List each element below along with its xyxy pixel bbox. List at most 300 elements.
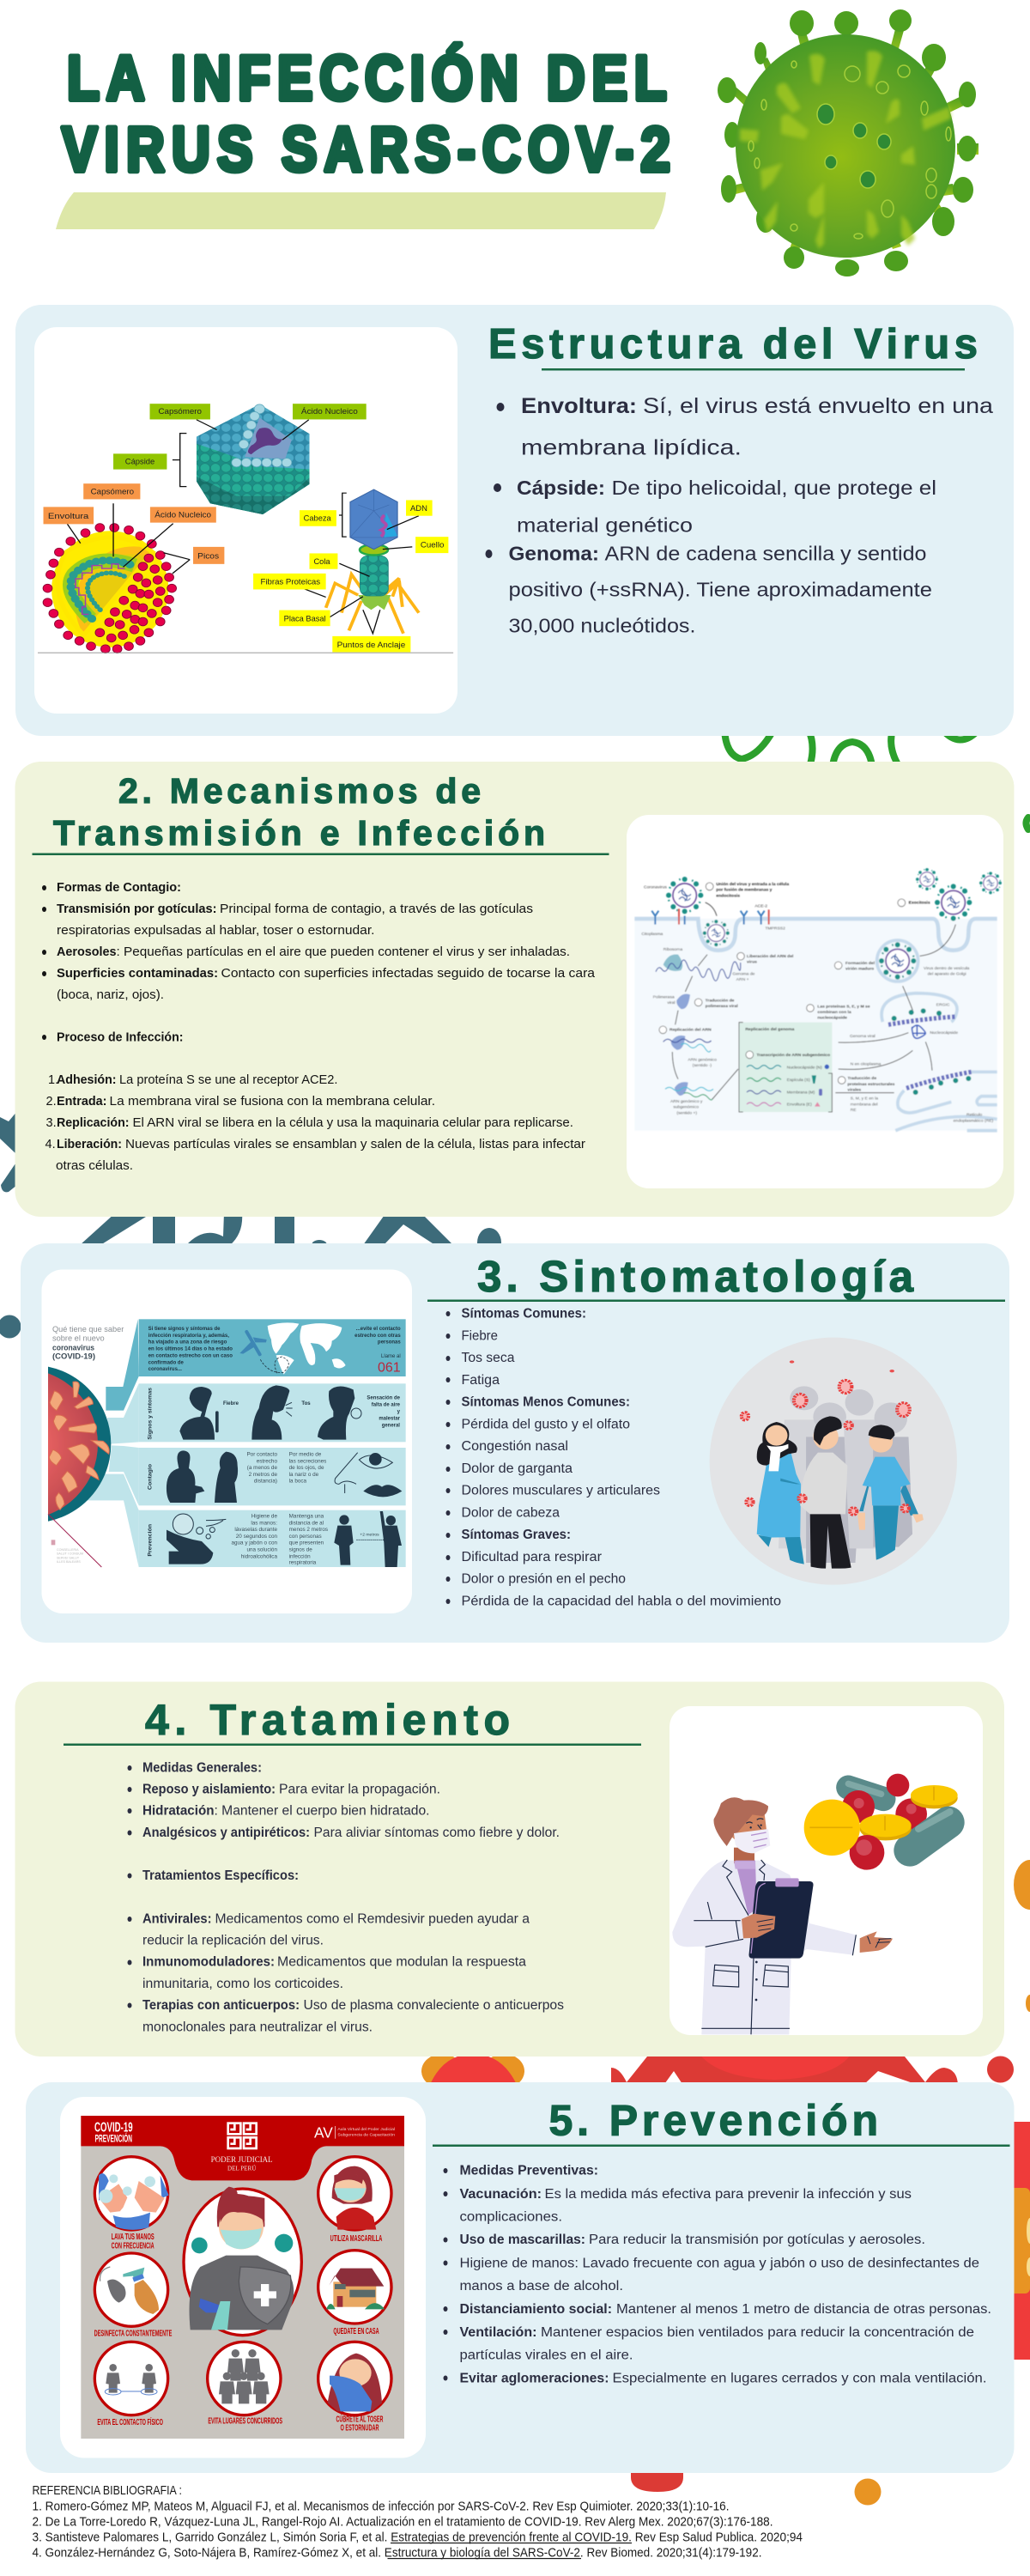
row 2 signs and symptoms: general [382, 1423, 400, 1428]
diagram captions: S, M, y E en la [851, 1097, 878, 1102]
row 4 prevention: distancia de al [289, 1520, 324, 1526]
references block: 2. De La Torre-Loredo R, Vázquez-Luna JL, Rangel-Rojo AI. Actualización en el tratamiento de COVID-19. Rev Alerg Mex. 2020;67(3):176-188. [33, 2514, 772, 2530]
arrows [672, 902, 955, 1099]
prevention list: complicaciones. [460, 2210, 562, 2224]
diagram captions: virales [847, 1088, 861, 1093]
treatment list: Medicamentos como el Remdesivir pueden ayudar a [215, 1911, 530, 1927]
diagram captions: membrana del [851, 1102, 878, 1107]
row 1 travel and contact: 061 [378, 1360, 401, 1375]
row 2 signs and symptoms: Sensación de [367, 1396, 401, 1401]
panel: prevencion [26, 2082, 1015, 2473]
caption: wash hands: LAVA TUS MANOS [112, 2233, 154, 2242]
diagram labels: Placa Basal [284, 615, 326, 623]
infographic title [52, 1325, 124, 1361]
row 3 contagion: Por contacto [246, 1451, 277, 1457]
panel background [15, 762, 1015, 1217]
diagram labels: Fibras Proteicas [260, 578, 320, 586]
diagram labels: Cabeza [304, 514, 331, 523]
bullet: envoltura: Envoltura: [521, 394, 637, 418]
row 4 prevention: lávaselas durante [234, 1527, 277, 1533]
diagram captions: Coronavirus [644, 885, 667, 890]
heading underline [64, 1743, 641, 1746]
heading underline [433, 2145, 1009, 2147]
diagram labels [44, 404, 448, 652]
pills [804, 1774, 958, 1870]
references block [33, 2483, 803, 2561]
RNA strands [656, 960, 817, 1100]
woman [757, 1422, 804, 1564]
row 2 signs and symptoms: Signos y síntomas [148, 1387, 154, 1440]
title line 1: LA INFECCIÓN DEL [67, 43, 667, 113]
panel background [21, 1243, 1009, 1643]
diagram captions: ARN genómico y [670, 1099, 703, 1104]
pointer lines [67, 420, 419, 634]
diagram labels: Capsómero [91, 488, 135, 496]
treatment list: Reposo y aislamiento: [142, 1783, 276, 1796]
diagram captions: Membrana (M) [787, 1091, 815, 1096]
symptoms list: Síntomas Graves: [462, 1528, 571, 1542]
caption: disinfect: DESINFECTA CONSTANTEMENTE [94, 2330, 173, 2339]
image card: covid-19 infographic: CONSELLERIA [57, 1548, 79, 1552]
row 3 contagion: Por medio de [289, 1451, 322, 1457]
symptoms list [446, 1307, 781, 1609]
diagram captions: subgenómico [673, 1105, 699, 1110]
bullet: capside: material genético [517, 513, 693, 536]
diagram captions: virus [747, 960, 757, 965]
caption: wash hands: CON FRECUENCIA [112, 2241, 154, 2251]
poster header: PODER JUDICIAL [211, 2155, 273, 2164]
bullet: capside [494, 477, 936, 536]
bullet: genoma: ARN de cadena sencilla y sentido [604, 543, 927, 565]
row 3 contagion: la nariz o de [289, 1472, 319, 1478]
title [62, 43, 670, 185]
image card: doctor and pills [670, 1706, 983, 2035]
row 4 prevention: Prevención [148, 1524, 154, 1557]
proceso de infeccion steps: Nuevas partículas virales se ensamblan y salen de la célula, listas para infectar [125, 1138, 585, 1151]
treatment list: Para evitar la propagación. [279, 1783, 440, 1796]
treatment list: Tratamientos Específicos: [142, 1868, 299, 1883]
prevention list [443, 2164, 991, 2385]
prevention list: Para reducir la transmisión por gotículas y aerosoles. [589, 2233, 925, 2247]
diagram captions: Espícula (S) [787, 1078, 810, 1083]
bullet: genoma: 30,000 nucleótidos. [508, 615, 695, 637]
row 2 signs and symptoms: Tos [301, 1401, 311, 1406]
prevention list: Uso de mascarillas: [460, 2233, 585, 2247]
panel: tratamiento [15, 1681, 1004, 2057]
treatment list [127, 1760, 564, 2035]
poster header [81, 2116, 404, 2180]
diagram labels: Cuello [421, 541, 445, 550]
row 4 prevention: hidroalcohólica [241, 1553, 277, 1559]
row 4 prevention [139, 1510, 406, 1567]
references block: REFERENCIA BIBLIOGRAFIA : [33, 2483, 182, 2498]
row 3 contagion [139, 1448, 406, 1505]
proceso de infeccion steps: 4. [45, 1138, 56, 1151]
prevention list: Mantener al menos 1 metro de distancia de otras personas. [616, 2302, 991, 2317]
infographic title: (COVID-19) [52, 1352, 95, 1361]
white receptors and ER [877, 940, 997, 1131]
row 4 prevention: +2 metros [360, 1533, 379, 1538]
diagram captions: Ribosoma [663, 947, 682, 952]
diagram captions: polimerasa viral [706, 1004, 738, 1009]
treatment list: Uso de plasma convaleciente o anticuerpos [304, 1998, 564, 2013]
bullet: genoma [486, 543, 932, 637]
treatment list: reducir la replicación del virus. [142, 1934, 324, 1947]
diagram labels: ADN [410, 505, 427, 513]
symptoms list: Dificultad para respirar [462, 1550, 602, 1564]
row 1 travel and contact: en contacto estrecho con un caso [148, 1354, 233, 1359]
row 1 travel and contact: en los últimos 14 días o ha estado [148, 1347, 233, 1352]
references block: 3. Santisteve Palomares L, Garrido González L, Simón Soria F, et al. Estrategias de prevención frente al COVID-19. Rev Esp Salud Publica. 2020;94 [33, 2530, 803, 2545]
diagram captions: Genoma de [732, 971, 755, 976]
caption: crowds: EVITA LUGARES CONCURRIDOS [208, 2417, 282, 2427]
row 2 signs and symptoms: malestar [379, 1416, 401, 1421]
row 1 travel and contact: infección respiratoria y, además, [148, 1334, 229, 1339]
diagram captions: Virus dentro de vesícula [924, 966, 970, 971]
background decorative shapes [0, 730, 1030, 2506]
row 3 contagion: de los ojos, de [289, 1465, 324, 1471]
diagram labels: Picos [197, 552, 219, 561]
diagram captions: Retículo [966, 1113, 983, 1118]
row 1 travel and contact: estrecho con otras [354, 1334, 401, 1339]
icon: mask [318, 2157, 391, 2230]
diagram captions: Genoma viral [850, 1034, 876, 1039]
prevention list: Evitar aglomeraciones: [460, 2372, 609, 2385]
row 4 prevention: las manos: [251, 1520, 277, 1526]
formas de contagio list: Formas de Contagio: [57, 881, 181, 895]
treatment list: monoclonales para neutralizar el virus. [142, 2020, 373, 2035]
diagram captions: Traducción de [706, 998, 735, 1003]
bullet: capside: De tipo helicoidal, que protege el [611, 477, 936, 499]
icon: green coronavirus [718, 9, 978, 276]
orange and red shapes on the right edge and gaps [421, 1860, 1030, 2506]
heading: mecanismos: 2. Mecanismos de [118, 771, 484, 811]
row 4 prevention: una solución [246, 1546, 277, 1552]
diagram labels: Ácido Nucleico [301, 408, 358, 416]
diagram captions: Replicación del genoma [745, 1027, 795, 1032]
ribosome and polymerase [663, 954, 682, 971]
ground line [38, 652, 453, 653]
poster header: DEL PERÚ [227, 2165, 256, 2172]
proceso de infeccion steps [45, 1073, 585, 1173]
diagram captions [641, 882, 994, 1123]
poster header: Subgerencia de Capacitación [337, 2132, 395, 2137]
row 4 prevention: que presenten [289, 1540, 324, 1546]
treatment list: Medidas Generales: [142, 1760, 262, 1776]
formas de contagio list: : Pequeñas partículas en el aire que pueden contener el virus y ser inhaladas. [117, 945, 570, 959]
formas de contagio list [42, 881, 596, 1044]
heading: mecanismos [53, 771, 548, 853]
diagram captions: Liberación del ARN del [747, 954, 794, 959]
symptoms list: Síntomas Menos Comunes: [462, 1394, 630, 1410]
world map [268, 1322, 346, 1375]
red virus circle [48, 1367, 112, 1522]
diagram captions: (sentido +) [676, 1110, 697, 1115]
treatment list: Hidratación [142, 1803, 215, 1819]
poster header: Aula Virtual del Poder Judicial [337, 2127, 395, 2132]
caption: cover cough: O ESTORNUDAR [340, 2424, 379, 2433]
diagram captions: Unión del virus y entrada a la célula [716, 882, 789, 887]
symptoms list: Tos seca [462, 1351, 515, 1365]
panel: estructura del virus [15, 305, 1014, 736]
diagram captions: nucleocápside [817, 1016, 847, 1021]
red virus particles [742, 1380, 910, 1515]
enveloped virus [43, 524, 177, 653]
diagram captions: ARN genómico [688, 1057, 717, 1062]
prevention list: manos a base de alcohol. [460, 2279, 623, 2293]
row 4 prevention: con personas [289, 1534, 322, 1540]
diagram captions: endocitosis [716, 893, 740, 898]
heading underline [542, 368, 965, 371]
row 3 contagion: las secreciones [289, 1458, 326, 1464]
diagram labels: Cola [313, 558, 330, 567]
diagram captions: Exocitosis [909, 900, 930, 905]
proceso de infeccion steps: Replicación: [57, 1116, 129, 1130]
panel background [15, 305, 1014, 736]
diagram captions: Las proteínas S, E, y M se [817, 1004, 870, 1009]
capsid diagram [194, 401, 312, 517]
image card: virus structure diagram [34, 327, 457, 714]
row 3 contagion: 2 metros de [249, 1472, 277, 1478]
diagram labels: Envoltura [48, 513, 89, 521]
treatment list: : Mantener el cuerpo bien hidratado. [215, 1803, 429, 1819]
symptoms list: Dolor o presión en el pecho [462, 1571, 626, 1587]
diagram captions: Citoplasma [641, 932, 663, 937]
row 1 travel and contact: confirmado de [148, 1360, 185, 1365]
boy in blue [857, 1425, 924, 1560]
symptoms list: Pérdida de la capacidad del habla o del movimiento [462, 1594, 781, 1609]
caption: cover cough [336, 2414, 384, 2433]
diagram captions: proteínas estructurales [847, 1082, 895, 1087]
symptoms list: Congestión nasal [462, 1439, 568, 1454]
proceso de infeccion steps: Entrada: [57, 1095, 106, 1109]
row 1 travel and contact: Llame al [381, 1354, 401, 1359]
background shadow people [779, 1386, 912, 1563]
diagram captions: combinan con la [817, 1010, 851, 1015]
diagram labels: Puntos de Anclaje [337, 641, 406, 650]
diagram captions: Transcripción de ARN subgenómico [756, 1053, 830, 1058]
symptoms list: Dolor de cabeza [462, 1506, 560, 1520]
panel background [15, 1681, 1004, 2057]
treatment list: Para aliviar síntomas como fiebre y dolor. [314, 1826, 560, 1840]
poster header: COVID-19 [94, 2121, 133, 2136]
diagram labels: Cápside [125, 458, 155, 466]
poster background [81, 2116, 404, 2439]
title highlight bar [56, 192, 666, 229]
diagram captions: ERGIC [936, 1003, 950, 1008]
proceso de infeccion steps: Liberación: [57, 1138, 122, 1151]
icon: wash hands [94, 2157, 169, 2230]
infographic title: coronavirus [52, 1343, 94, 1352]
diagram captions: viral [667, 1000, 675, 1005]
diagram captions: Formación del [845, 961, 876, 966]
title line 2: VIRUS SARS-COV-2 [62, 115, 670, 185]
proceso de infeccion steps: 2. [46, 1095, 57, 1109]
row 3 contagion: distancia) [254, 1479, 277, 1485]
row 1 travel and contact: Si tiene signos y síntomas de [148, 1327, 221, 1332]
treatment list: Terapias con anticuerpos: [142, 1998, 300, 2013]
references block: 4. González-Hernández G, Soto-Nájera B, Ramírez-Gómez X, et al. Estructura y biología del SARS-CoV-2. Rev Biomed. 2020;31(4):179-192. [33, 2545, 762, 2561]
heading: tratamiento: 4. Tratamiento [145, 1696, 513, 1744]
doctor [672, 1797, 893, 2034]
panel: sintomatologia [0, 1243, 1009, 1643]
icon: central masked figure [184, 2187, 301, 2336]
prevention list: Es la medida más efectiva para prevenir la infección y sus [544, 2187, 912, 2202]
row 4 prevention: menos 2 metros [289, 1527, 328, 1533]
bullet: envoltura [496, 394, 993, 460]
icon: physical distance [94, 2342, 168, 2415]
row 1 travel and contact: coronavirus... [148, 1367, 182, 1372]
transcripts box [739, 1023, 832, 1112]
diagram captions: Nucleocápside (N) [787, 1065, 822, 1070]
diagram captions: Envoltura (E) [787, 1103, 812, 1108]
infographic title: sobre el nuevo [52, 1334, 105, 1343]
prevention list: partículas virales en el aire. [460, 2348, 633, 2363]
row 3 contagion: Contagio [148, 1464, 154, 1490]
symptoms list: Pérdida del gusto y el olfato [462, 1417, 630, 1432]
bullet: capside: Cápside: [517, 477, 605, 499]
row 2 signs and symptoms: y [397, 1410, 401, 1415]
panel background [26, 2082, 1015, 2473]
heading underline [427, 1300, 1005, 1302]
image card: covid-19 infographic [41, 1269, 412, 1613]
diagram captions: ARN + [736, 977, 749, 982]
symptoms list: Dolores musculares y articulares [462, 1484, 660, 1498]
bullet: genoma: positivo (+ssRNA). Tiene aproximadamente [508, 579, 932, 601]
diagram labels: Ácido Nucleico [154, 511, 212, 519]
poster header: AV [314, 2123, 333, 2141]
prevention list: Vacunación: [460, 2187, 542, 2202]
symptoms list: Síntomas Comunes: [462, 1307, 586, 1321]
proceso de infeccion steps: La proteína S se une al receptor ACE2. [119, 1073, 338, 1087]
formas de contagio list: Proceso de Infección: [57, 1030, 184, 1044]
image card: covid-19 infographic: ILLES BALEARS [57, 1560, 81, 1564]
diagram captions: virión maduro [845, 967, 874, 972]
references block: 1. Romero-Gómez MP, Mateos M, Alguacil FJ, et al. Mecanismos de infección por SARS-CoV-2. Rev Esp Quimioter. 2020;33(1):10-16. [33, 2499, 730, 2514]
heading: mecanismos: Transmisión e Infección [53, 813, 548, 853]
heading: prevencion: 5. Prevención [549, 2097, 882, 2145]
diagram captions: Traducción de [847, 1076, 876, 1081]
heading: estructura del virus: Estructura del Virus [488, 321, 981, 368]
treatment list: Analgésicos y antipiréticos: [142, 1826, 310, 1840]
receptors [651, 908, 769, 925]
diagram captions: Polimerasa [653, 994, 675, 999]
proceso de infeccion steps: Adhesión: [57, 1073, 117, 1087]
row 1 travel and contact: ...evite el contacto [356, 1327, 401, 1332]
endoplasmic reticulum spikes [888, 1008, 972, 1095]
image card: prevention poster [60, 2097, 426, 2458]
illustration: sick people in a circle [710, 1338, 957, 1585]
formas de contagio list: Transmisión por gotículas: [57, 902, 216, 916]
green doodles between panels 1 and 2 [724, 730, 1028, 829]
diagram captions: RE [851, 1108, 857, 1113]
bullet: envoltura: Sí, el virus está envuelto en una [643, 394, 993, 418]
row 2 signs and symptoms: Fiebre [223, 1401, 239, 1406]
row 4 prevention: Mantenga una [289, 1513, 324, 1519]
proceso de infeccion steps: La membrana viral se fusiona con la membrana celular. [110, 1095, 435, 1109]
proceso de infeccion steps: otras células. [56, 1159, 133, 1173]
diagonal line and logo [48, 1514, 101, 1567]
formas de contagio list: respiratorias expulsadas al hablar, toser o estornudar. [57, 924, 375, 938]
bullet: envoltura: membrana lipídica. [521, 436, 742, 460]
row 4 prevention: infección [289, 1553, 311, 1559]
formas de contagio list: Superficies contaminadas: [57, 967, 218, 981]
caption: wash hands [112, 2233, 154, 2251]
row 4 prevention: 20 segundos con [236, 1534, 277, 1540]
image card: replication cycle diagram [627, 815, 1003, 1188]
diagram labels: Capsómero [158, 408, 203, 416]
icon: crowds [208, 2342, 281, 2415]
row 3 contagion: la boca [289, 1479, 307, 1485]
teal shapes between panels 2 and 3 [0, 1111, 501, 1338]
diagram captions: endoplasmático (RE) [954, 1118, 994, 1123]
prevention list: Higiene de manos: Lavado frecuente con agua y jabón o uso de desinfectantes de [460, 2257, 979, 2270]
bullet: genoma: Genoma: [508, 543, 599, 565]
treatment list: Antivirales: [142, 1911, 211, 1927]
step number circles [659, 883, 906, 1084]
caption: physical distance: EVITA EL CONTACTO FÍSICO [97, 2418, 163, 2427]
diagram captions: (sentido -) [693, 1063, 712, 1068]
diagram captions: del aparato de Golgi [928, 972, 966, 977]
row 4 prevention: agua y jabón o con [232, 1540, 277, 1546]
poster header: PREVENCIÓN [95, 2131, 132, 2144]
proceso de infeccion steps: El ARN viral se libera en la célula y usa la maquinaria celular para replicarse. [132, 1116, 573, 1130]
diagram captions: por fusión de membranas y [716, 888, 772, 893]
row 4 prevention: signos de [289, 1546, 312, 1552]
row 4 prevention: Higiene de [251, 1513, 277, 1519]
caption: mask: UTILIZA MASCARILLA [330, 2234, 382, 2244]
treatment list: inmunitaria, como los corticoides. [142, 1977, 343, 1991]
formas de contagio list: Aerosoles [57, 945, 117, 959]
formas de contagio list: Contacto con superficies infectadas seguido de tocarse la cara [221, 967, 596, 981]
treatment list: Medicamentos que modulan la respuesta [277, 1954, 526, 1970]
formas de contagio list: Principal forma de contagio, a través de las gotículas [220, 902, 533, 916]
infographic title: Qué tiene que saber [52, 1325, 124, 1334]
proceso de infeccion steps: 1. [48, 1073, 58, 1087]
airplane [239, 1332, 267, 1354]
treatment list: Inmunomoduladores: [142, 1954, 275, 1970]
image card: covid-19 infographic: SALUT I CONSUM [57, 1552, 83, 1556]
diagram captions: TMPRSS2 [765, 927, 785, 932]
heading: sintomatologia: 3. Sintomatología [477, 1252, 917, 1301]
row 2 signs and symptoms [139, 1383, 406, 1442]
diagram captions: N en citoplasma [851, 1061, 882, 1066]
row 2 signs and symptoms: falta de aire [372, 1403, 401, 1408]
row 3 contagion: (a menos de [247, 1465, 277, 1471]
prevention list: Medidas Preventivas: [460, 2164, 598, 2178]
icon: cover cough [318, 2342, 391, 2415]
caption: house: QUEDATE EN CASA [333, 2327, 379, 2336]
formas de contagio list: (boca, nariz, ojos). [57, 988, 164, 1002]
image card: covid-19 infographic: SERVEI SALUT [57, 1556, 80, 1559]
bacteriophage [326, 489, 419, 634]
nucleocapsid [912, 1024, 925, 1038]
symptoms list: Fatiga [462, 1373, 500, 1388]
prevention list: Ventilación: [460, 2325, 537, 2340]
icon: disinfect [94, 2253, 168, 2326]
proceso de infeccion steps: 3. [46, 1116, 57, 1130]
diagram captions: Nucleocápside [930, 1030, 958, 1036]
heading underline [33, 854, 609, 855]
panel: mecanismos de transmision e infeccion [15, 762, 1015, 1217]
cytoplasm background [634, 919, 997, 1131]
symptoms list: Dolor de garganta [462, 1461, 573, 1476]
row 1 travel and contact: personas [378, 1340, 401, 1346]
row 3 contagion: estrecho [257, 1458, 277, 1464]
row 1 travel and contact [139, 1319, 406, 1376]
connector bands [86, 1319, 139, 1567]
symptoms list: Fiebre [462, 1329, 498, 1343]
